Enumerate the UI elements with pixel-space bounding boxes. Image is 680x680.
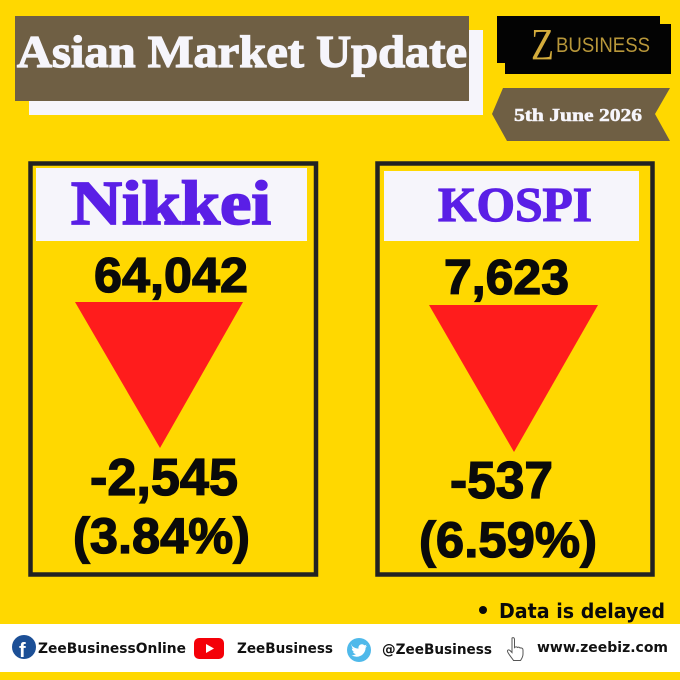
KOSPI percent change: (6.59%) — [419, 512, 597, 568]
icon: youtube — [194, 638, 224, 659]
KOSPI index value: 7,623 — [444, 251, 569, 305]
Nikkei index value: 64,042 — [94, 249, 248, 303]
Nikkei heading: Nikkei — [71, 170, 271, 238]
KOSPI heading — [384, 171, 639, 241]
icon: facebook — [12, 635, 36, 662]
date ribbon — [492, 88, 670, 141]
logo: Zee Business: BUSINESS — [556, 34, 650, 57]
Nikkei point change: -2,545 — [90, 449, 238, 507]
date ribbon: 5th June 2026 — [514, 105, 642, 125]
title banner — [15, 16, 483, 115]
KOSPI heading: KOSPI — [438, 177, 592, 232]
Nikkei percent change: (3.84%) — [73, 508, 250, 564]
icon: red down triangle — [429, 305, 598, 452]
logo: Zee Business — [497, 16, 671, 74]
Nikkei heading — [36, 168, 307, 241]
logo: Zee Business: Z — [531, 20, 554, 69]
footer bar — [0, 624, 680, 672]
title text: Asian Market Update — [17, 26, 467, 77]
icon: red down triangle — [75, 302, 243, 448]
youtube handle: ZeeBusiness — [237, 641, 333, 657]
panel: Nikkei — [30, 164, 316, 574]
website: www.zeebiz.com — [537, 640, 668, 656]
panel: KOSPI — [378, 164, 652, 574]
KOSPI point change: -537 — [450, 452, 553, 510]
icon: facebook: f — [19, 640, 26, 662]
icon: pointing hand — [507, 638, 523, 660]
twitter handle: @ZeeBusiness — [382, 642, 492, 658]
icon: twitter — [347, 638, 371, 662]
note: data is delayed: Data is delayed — [499, 599, 665, 623]
facebook handle: ZeeBusinessOnline — [38, 641, 186, 657]
